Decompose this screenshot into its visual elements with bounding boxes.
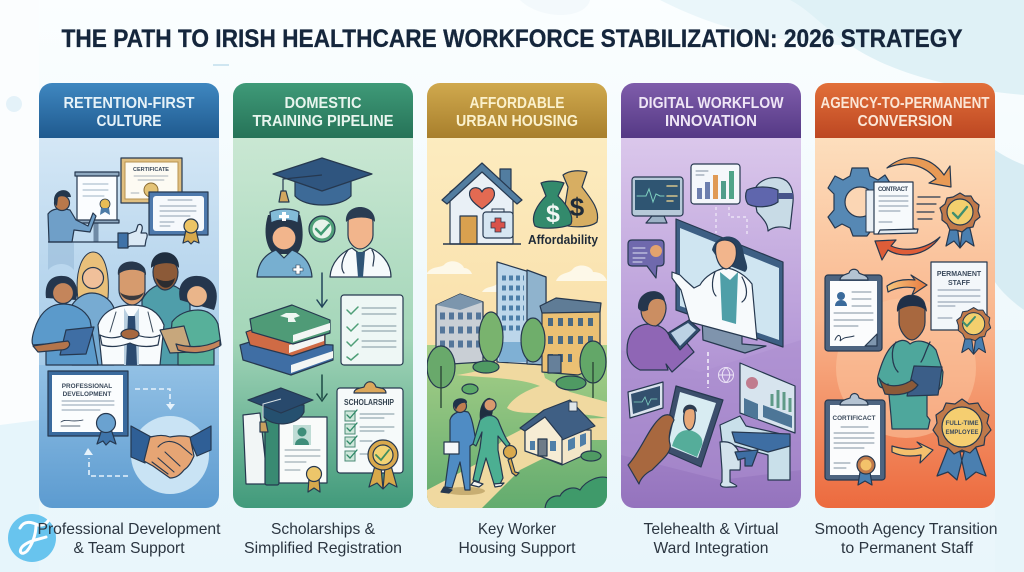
caption: smooth agency transition: Smooth Agency Transition bbox=[814, 521, 998, 538]
money bags: $ bbox=[570, 192, 585, 222]
telehealth screen bbox=[676, 219, 783, 353]
arrow down bbox=[317, 273, 327, 307]
panel 5 header: AGENCY-TO-PERMANENT bbox=[820, 95, 990, 112]
walking worker with key bbox=[471, 398, 510, 487]
panel 3 header: URBAN HOUSING bbox=[456, 113, 578, 130]
caption: smooth agency transition: to Permanent Staff bbox=[841, 540, 974, 557]
telehealth doctor bbox=[672, 236, 757, 340]
scholarship clipboard bbox=[337, 382, 403, 489]
flipchart bbox=[75, 172, 119, 242]
person: teal nurse with clipboard bbox=[160, 276, 221, 365]
bush lower right bbox=[545, 477, 608, 510]
contract bbox=[866, 182, 940, 234]
person: doctor bbox=[98, 262, 164, 365]
arrow to full-time bbox=[892, 442, 933, 463]
doctor bbox=[330, 207, 391, 277]
panel: domestic training pipeline bbox=[233, 83, 413, 508]
nurse bbox=[257, 209, 312, 277]
full-time employee badge: FULL-TIME bbox=[946, 420, 979, 427]
walking worker bbox=[441, 398, 485, 495]
checklist card bbox=[341, 295, 403, 365]
open book and resume bbox=[243, 413, 327, 492]
vitals monitor bbox=[632, 177, 683, 223]
certificate bbox=[121, 158, 182, 203]
caption: key worker: Key Worker bbox=[478, 521, 557, 538]
tall building bbox=[497, 262, 546, 365]
key bbox=[504, 446, 519, 476]
clouds bbox=[427, 261, 607, 292]
panel: digital workflow innovation bbox=[621, 83, 801, 508]
caption: telehealth: Telehealth & Virtual bbox=[644, 521, 778, 538]
caption: professional development: Professional Development bbox=[38, 521, 221, 538]
panel 1 body bbox=[39, 130, 219, 365]
caption: telehealth bbox=[644, 521, 778, 557]
panel 4 header bbox=[621, 83, 801, 138]
graduation cap small bbox=[248, 388, 313, 432]
handshake bbox=[131, 416, 211, 494]
panel 2 header bbox=[233, 83, 413, 138]
caption: key worker bbox=[458, 521, 576, 557]
dashboard panel bbox=[740, 363, 795, 433]
permanent staff document: PERMANENT bbox=[937, 271, 982, 278]
virtual ward bed and chair bbox=[720, 416, 790, 487]
professional development certificate bbox=[48, 371, 128, 445]
caption: telehealth: Ward Integration bbox=[654, 540, 768, 557]
trees bbox=[427, 312, 606, 408]
lower platform bbox=[621, 340, 801, 480]
panel 4 header: DIGITAL WORKFLOW bbox=[638, 95, 784, 112]
caption: smooth agency transition bbox=[814, 521, 998, 557]
panel: affordable urban housing bbox=[427, 83, 608, 510]
tablet with patient bbox=[662, 386, 723, 467]
panel 5 body bbox=[815, 130, 995, 508]
professional development certificate: DEVELOPMENT bbox=[63, 391, 111, 398]
permanent staff document: STAFF bbox=[948, 280, 971, 287]
permanent nurse bbox=[878, 295, 943, 429]
badge check bbox=[940, 193, 980, 248]
presenter bbox=[48, 190, 120, 270]
panel 2 header: DOMESTIC bbox=[284, 95, 362, 112]
panel 5 header bbox=[815, 83, 995, 138]
bottom curved arrow bbox=[875, 237, 940, 260]
small vitals tablet bbox=[628, 382, 663, 418]
care team bbox=[32, 252, 221, 365]
panel 5 header: CONVERSION bbox=[858, 113, 952, 130]
panel: retention-first culture bbox=[32, 83, 221, 508]
caption: scholarships: Simplified Registration bbox=[244, 540, 402, 557]
dashed link bbox=[707, 352, 709, 388]
caption: professional development bbox=[38, 521, 221, 557]
caption: key worker: Housing Support bbox=[458, 540, 576, 557]
caption: scholarships: Scholarships & bbox=[271, 521, 375, 538]
dashed connectors bbox=[716, 207, 747, 236]
chat bubble bbox=[628, 240, 664, 278]
winding path bbox=[427, 360, 607, 510]
stack of books bbox=[240, 305, 333, 375]
affordability label: Affordability bbox=[528, 233, 598, 247]
ground bbox=[427, 345, 607, 510]
panel: agency-to-permanent conversion bbox=[815, 83, 995, 508]
panel 4 body bbox=[621, 130, 801, 508]
small house bbox=[520, 400, 601, 465]
money bags: $ bbox=[546, 200, 560, 228]
professional development certificate: PROFESSIONAL bbox=[62, 383, 112, 390]
right building bbox=[540, 298, 601, 375]
full-time employee badge bbox=[933, 399, 991, 480]
thumbs up bbox=[118, 224, 147, 248]
top curved arrow bbox=[887, 158, 951, 187]
panel 1 header bbox=[39, 83, 219, 138]
certificate clipboard bbox=[825, 394, 885, 485]
scholarship clipboard: SCHOLARSHIP bbox=[344, 398, 394, 407]
staff clipboard bbox=[825, 269, 882, 351]
blue diploma bbox=[149, 192, 208, 244]
panel 3 header bbox=[427, 83, 607, 138]
person: nurse with tablet bbox=[32, 276, 98, 365]
left building bbox=[436, 294, 483, 365]
panel 1 lower section bbox=[39, 365, 219, 508]
certificate clipboard: CORTIFICACT bbox=[832, 415, 876, 422]
globe bbox=[718, 368, 734, 382]
certificate: CERTIFICATE bbox=[133, 167, 169, 173]
gear bbox=[828, 168, 894, 236]
person: teal scrubs back bbox=[142, 252, 190, 365]
circular arrows bbox=[84, 389, 175, 476]
caption: scholarships bbox=[244, 521, 402, 557]
person: blonde nurse bbox=[72, 252, 114, 365]
patient with tablet bbox=[627, 291, 700, 372]
bar chart card bbox=[691, 164, 740, 204]
logo badge bbox=[8, 514, 56, 562]
panel 1 header: CULTURE bbox=[96, 113, 162, 130]
check badge bbox=[309, 216, 335, 242]
panel 3 header: AFFORDABLE bbox=[470, 95, 565, 112]
neighbourhood landscape bbox=[427, 262, 608, 510]
graduation cap bbox=[273, 158, 372, 205]
hand bbox=[628, 415, 674, 484]
soft glow bbox=[836, 298, 976, 438]
panel 4 header: INNOVATION bbox=[665, 113, 757, 130]
arrow to permanent bbox=[887, 275, 927, 295]
arrow down bbox=[317, 375, 327, 401]
permanent staff document bbox=[931, 262, 991, 354]
caption: professional development: & Team Support bbox=[74, 540, 185, 557]
money bags bbox=[533, 171, 598, 228]
panel 2 body bbox=[233, 130, 413, 508]
house with heart bbox=[442, 163, 522, 244]
panel 2 header: TRAINING PIPELINE bbox=[252, 113, 394, 130]
vr headset bbox=[746, 178, 793, 231]
panel 3 body bbox=[427, 130, 607, 508]
full-time employee badge: EMPLOYEE bbox=[946, 429, 979, 436]
contract: CONTRACT bbox=[878, 187, 908, 193]
panel 1 header: RETENTION-FIRST bbox=[64, 95, 195, 112]
